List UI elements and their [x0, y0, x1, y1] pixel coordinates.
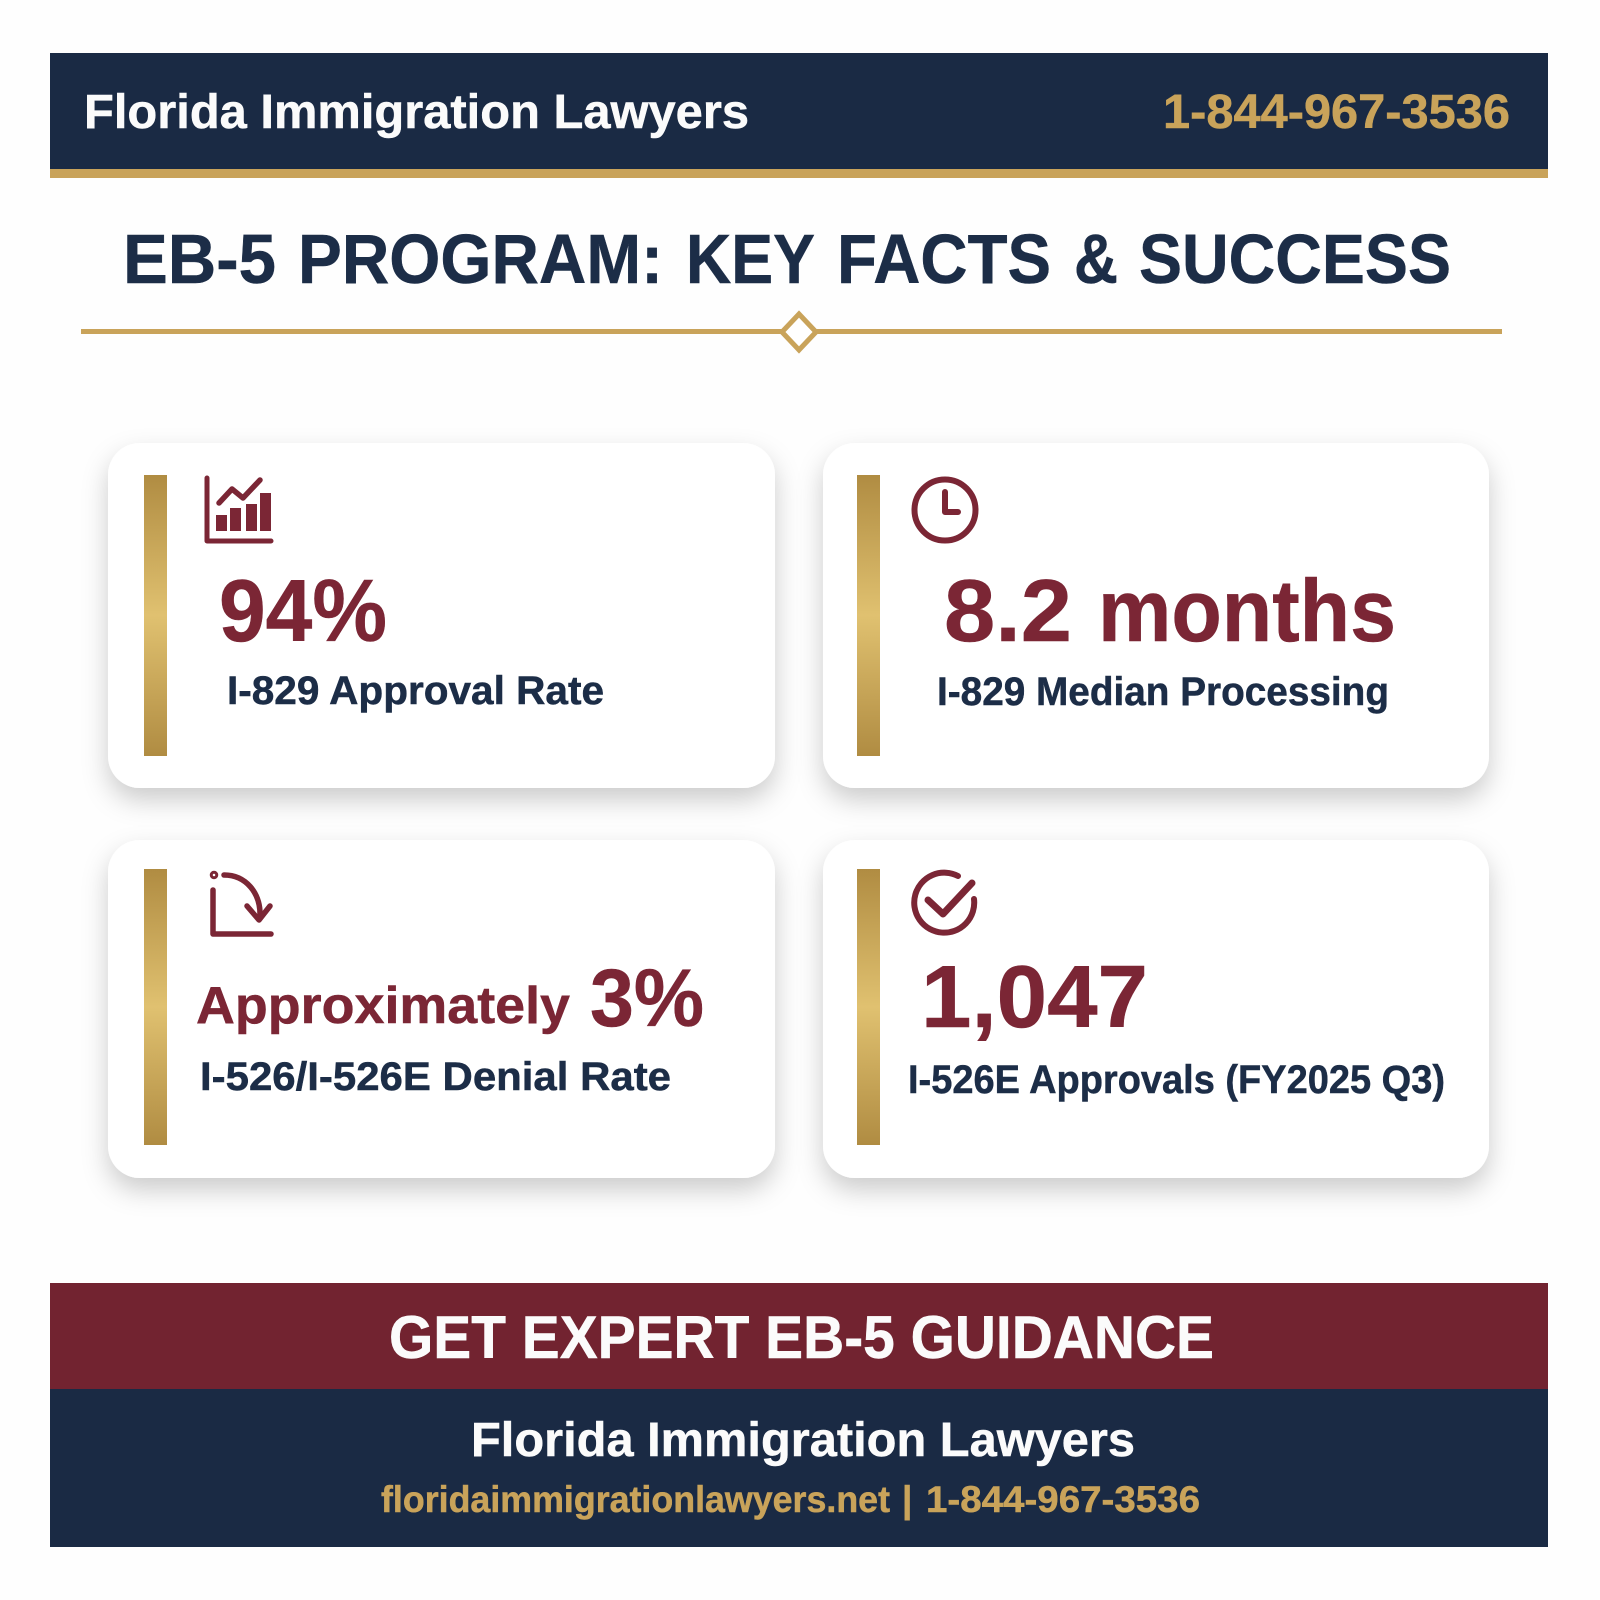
- footer firm name: Florida Immigration Lawyers: [471, 1414, 1135, 1467]
- title: SUCCESS: [1139, 220, 1451, 298]
- title: [123, 220, 1451, 298]
- icon: check circle: [914, 873, 974, 933]
- footer website and phone: floridaimmigrationlawyers.net: [381, 1479, 890, 1520]
- stat: Approximately 3%: 3%: [590, 953, 704, 1044]
- stat: 8.2 months: 8.2: [944, 561, 1072, 660]
- footer contact block: [50, 1389, 1548, 1547]
- title: KEY: [686, 220, 815, 298]
- stat: 8.2 months: [944, 561, 1396, 660]
- label: I-526E Approvals (FY2025 Q3): I-526E Approvals (FY2025 Q3): [908, 1058, 1445, 1102]
- title: PROGRAM:: [298, 220, 663, 298]
- icon: declining arrow: [212, 874, 271, 934]
- label: I-526/I-526E Denial Rate: I-526/I-526E Denial Rate: [200, 1055, 671, 1099]
- footer website and phone: [381, 1479, 1200, 1521]
- stat: Approximately 3%: [196, 953, 704, 1044]
- title: &: [1074, 220, 1118, 298]
- panel: I-526E approvals: [823, 840, 1489, 1178]
- footer website and phone: |: [902, 1479, 912, 1521]
- stat: 94%: 94%: [219, 561, 387, 660]
- stat: 1,047: 1,047: [921, 947, 1148, 1046]
- label: I-829 Approval Rate: I-829 Approval Rate: [227, 669, 604, 713]
- panel: I-829 median processing: [823, 443, 1489, 788]
- footer call to action: [50, 1283, 1548, 1389]
- label: I-829 Median Processing: I-829 Median Processing: [937, 670, 1389, 714]
- panel: I-526 denial rate: [108, 840, 775, 1178]
- icon: bar chart with trend line: [207, 478, 271, 541]
- footer website and phone: 1-844-967-3536: [926, 1479, 1200, 1520]
- heading: get expert guidance: GET EXPERT EB-5 GUIDANCE: [389, 1304, 1214, 1371]
- stat: Approximately 3%: Approximately: [196, 977, 570, 1035]
- title: EB-5: [123, 220, 276, 298]
- panel: I-829 approval rate: [108, 443, 775, 788]
- title: FACTS: [837, 220, 1051, 298]
- header bar: [50, 53, 1548, 178]
- icon: clock: [914, 480, 976, 540]
- header firm name: Florida Immigration Lawyers: [84, 86, 749, 139]
- stat: 8.2 months: months: [1098, 561, 1396, 660]
- title divider with diamond: [81, 314, 1502, 350]
- header phone number: 1-844-967-3536: [1163, 86, 1510, 139]
